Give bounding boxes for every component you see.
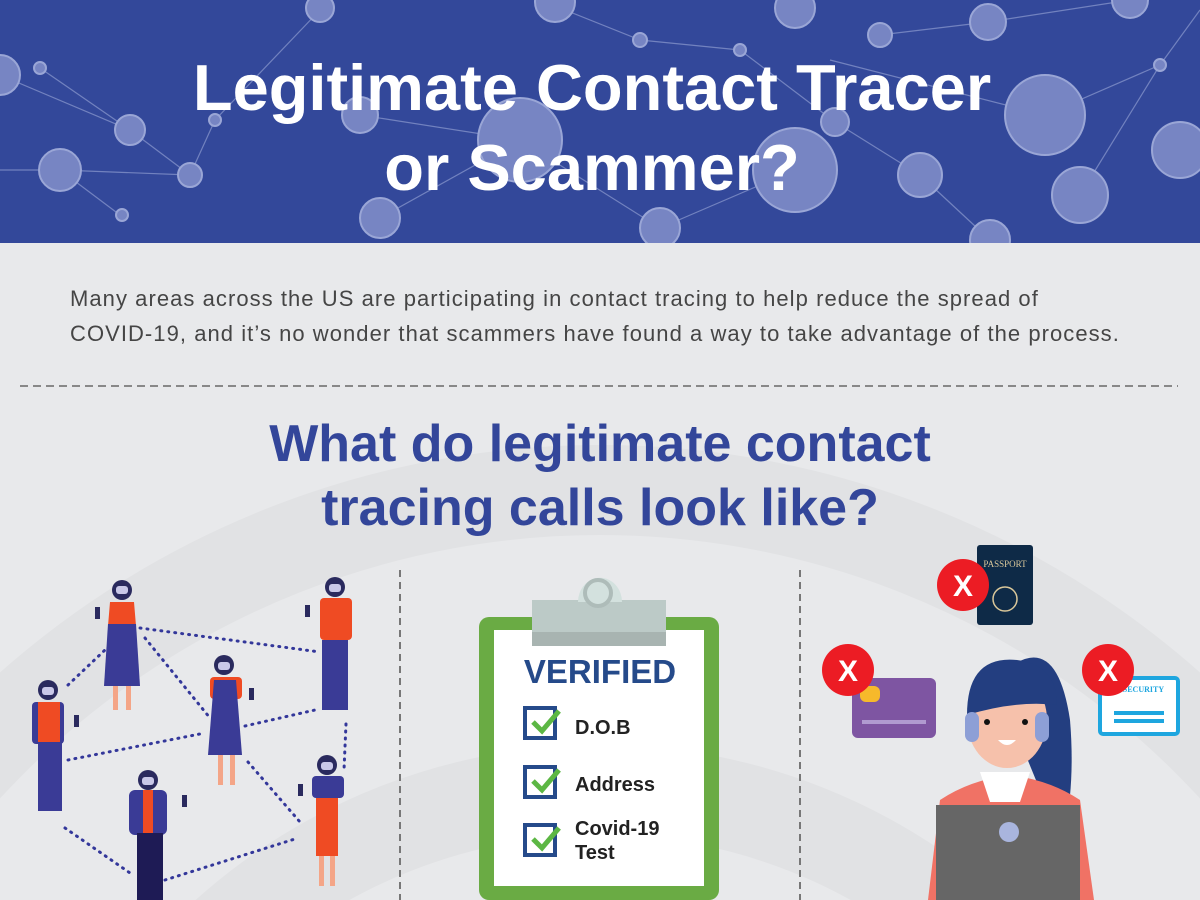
- title: Legitimate Contact Tracer: [193, 51, 991, 124]
- passport: PASSPORT: [983, 559, 1027, 569]
- credit card: [852, 678, 936, 738]
- red x badges: X: [953, 570, 973, 603]
- agent: [928, 658, 1094, 900]
- panel: verified clipboard: [479, 578, 719, 900]
- panel: verified clipboard: Address: [575, 774, 655, 796]
- social security card: L SECURITY: [1116, 685, 1164, 694]
- title: or Scammer?: [384, 131, 800, 204]
- person 4: [208, 655, 254, 785]
- intro text: COVID-19, and it’s no wonder that scammers have found a way to take advantage of the process.: [70, 321, 1120, 346]
- red x badges: X: [838, 655, 858, 688]
- subheading: [269, 415, 931, 537]
- person 6: [298, 755, 344, 886]
- panel: network of people: [32, 577, 352, 900]
- intro text: [70, 286, 1120, 346]
- subheading: tracing calls look like?: [321, 479, 879, 537]
- person 3: [32, 680, 79, 811]
- red x badges: [822, 559, 1134, 696]
- panel: verified clipboard: Test: [575, 842, 615, 864]
- panel: verified clipboard: Covid-19: [575, 818, 659, 840]
- panel: verified clipboard: D.O.B: [575, 717, 631, 739]
- red x badges: X: [1098, 655, 1118, 688]
- panel: verified clipboard: VERIFIED: [524, 653, 676, 690]
- title: [193, 51, 991, 204]
- panel: contact tracer agent: [822, 545, 1180, 900]
- intro text: Many areas across the US are participating in contact tracing to help reduce the spread of: [70, 286, 1039, 311]
- header banner: [0, 0, 1200, 243]
- person 5: [129, 770, 187, 900]
- person 2: [305, 577, 352, 710]
- subheading: What do legitimate contact: [269, 415, 931, 473]
- person 1: [95, 580, 140, 710]
- passport: [977, 545, 1033, 625]
- social security card: [1100, 678, 1178, 734]
